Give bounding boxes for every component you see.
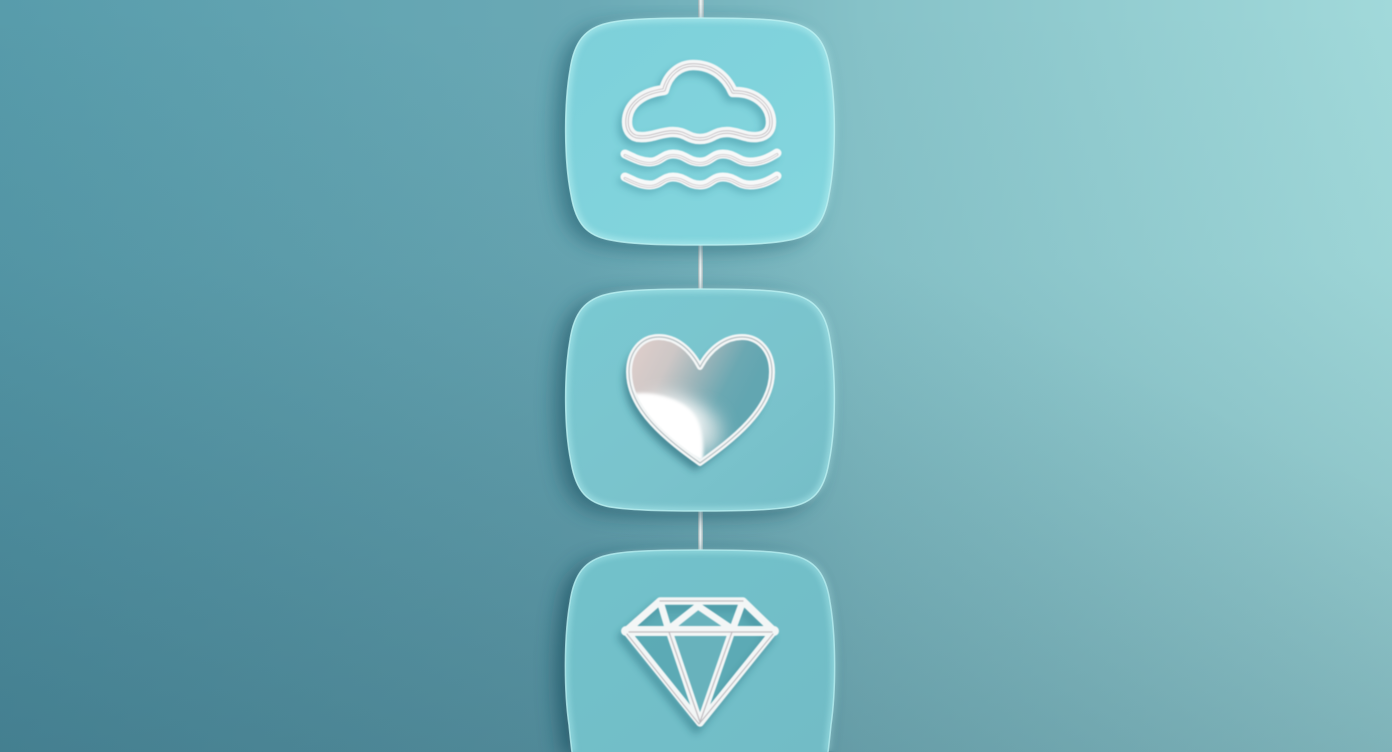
icon: diamond	[622, 601, 774, 729]
icon: upper wave	[622, 153, 777, 166]
icon: lower wave	[622, 176, 777, 189]
connector rods	[698, 0, 704, 551]
panel: cloud and waves	[556, 17, 837, 250]
panel: diamond	[555, 549, 838, 752]
icon: cloud	[622, 65, 777, 189]
panel: heart	[556, 288, 837, 516]
icon: silver heart	[624, 337, 772, 471]
